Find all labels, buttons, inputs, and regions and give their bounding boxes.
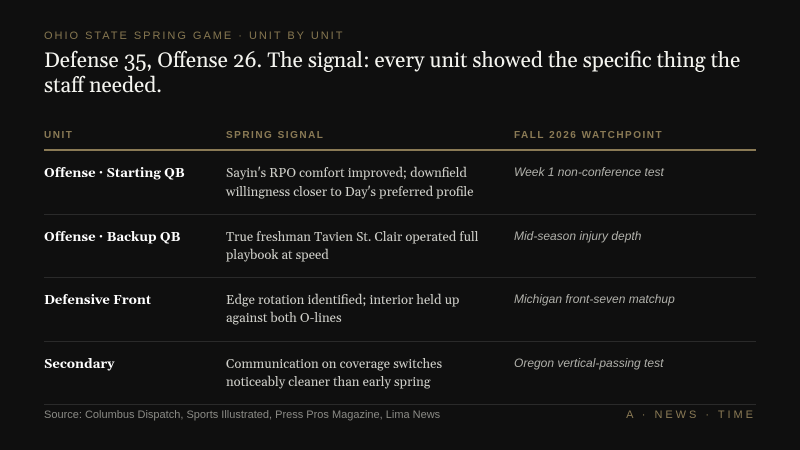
row 3 signal: against both O-lines	[226, 311, 342, 327]
header rule	[44, 149, 756, 151]
row 2 unit: Offense · Backup QB	[44, 230, 180, 246]
row 1 signal: Sayin's RPO comfort improved; downfield	[226, 166, 467, 182]
row 1 signal	[226, 166, 474, 201]
table header: spring signal: SPRING SIGNAL	[226, 130, 324, 141]
row 2 signal	[226, 230, 478, 264]
row 4 unit: Secondary	[44, 357, 114, 373]
row 1 signal: willingness closer to Day's preferred profile	[226, 185, 474, 201]
row 2 signal: playbook at speed	[226, 248, 329, 264]
row 3 signal	[226, 293, 460, 327]
row 3 unit: Defensive Front	[44, 293, 151, 309]
brand mark: A · NEWS · TIME	[626, 409, 756, 421]
row 4 signal	[226, 357, 442, 391]
table header: unit: UNIT	[44, 130, 73, 141]
row 4 signal: noticeably cleaner than early spring	[226, 375, 430, 391]
row 3 watchpoint: Michigan front-seven matchup	[514, 292, 675, 306]
row 2 signal: True freshman Tavien St. Clair operated full	[226, 230, 478, 246]
row 4 watchpoint: Oregon vertical-passing test	[514, 356, 663, 370]
title: Defense 35, Offense 26. The signal: every unit showed the specific thing the staff needed.	[44, 48, 740, 100]
row 2 watchpoint: Mid-season injury depth	[514, 229, 641, 243]
row 1 unit: Offense · Starting QB	[44, 166, 185, 182]
table header: fall 2026 watchpoint: FALL 2026 WATCHPOINT	[514, 130, 663, 141]
eyebrow: OHIO STATE SPRING GAME · UNIT BY UNIT	[44, 30, 344, 42]
row 3 signal: Edge rotation identified; interior held up	[226, 293, 460, 309]
row 4 signal: Communication on coverage switches	[226, 357, 442, 373]
row 1 watchpoint: Week 1 non-conference test	[514, 165, 664, 179]
source note: Source: Columbus Dispatch, Sports Illustrated, Press Pros Magazine, Lima News	[44, 409, 440, 421]
